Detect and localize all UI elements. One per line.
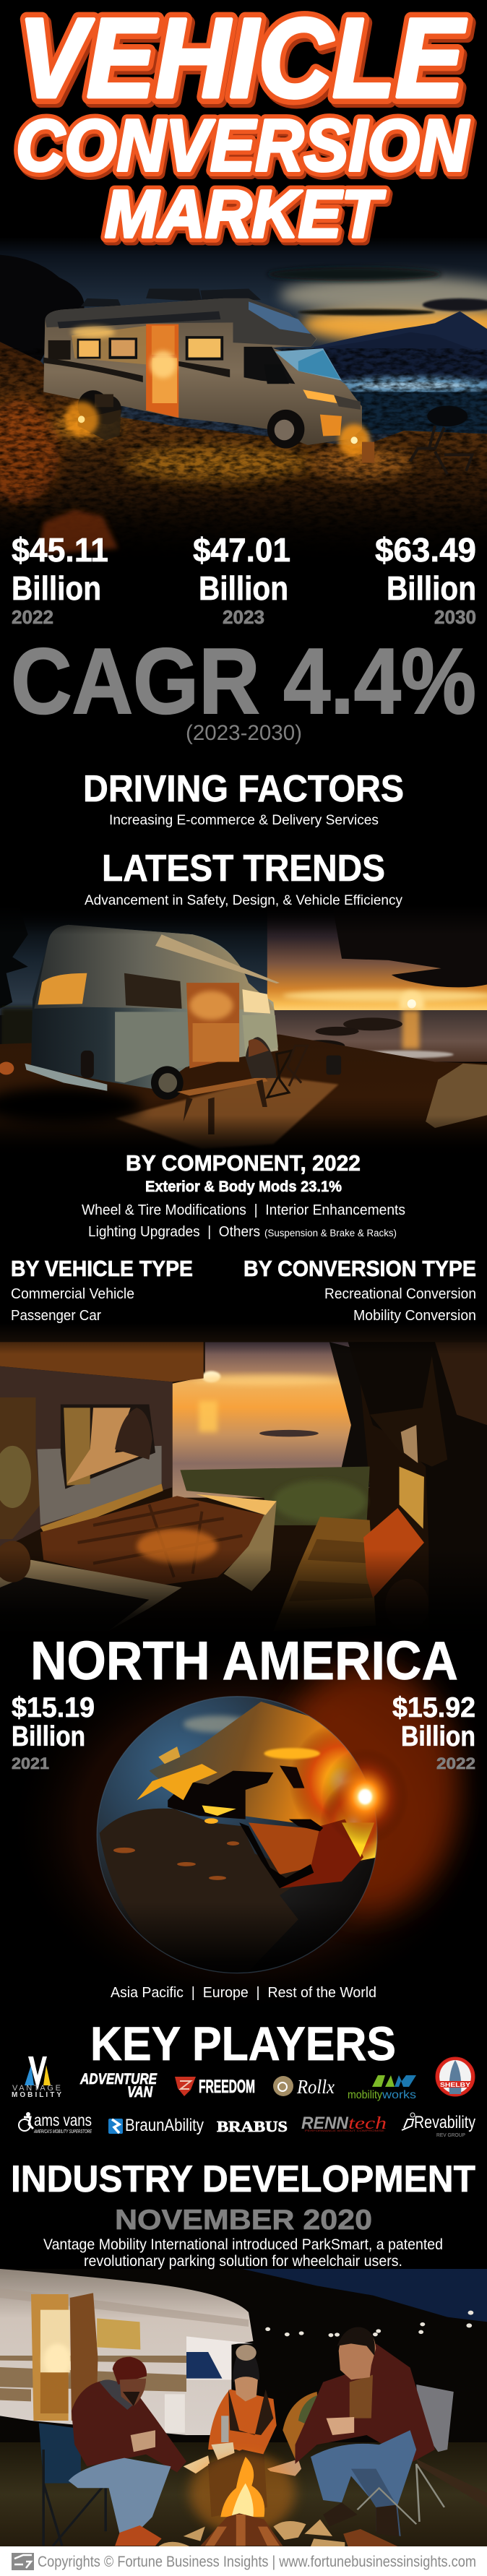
latest trend text: Advancement in Safety, Design, & Vehicle Efficiency bbox=[85, 893, 402, 908]
heading: industry development: INDUSTRY DEVELOPMENT bbox=[11, 2158, 475, 2200]
logo: MobilityWorks bbox=[348, 2075, 416, 2101]
figure: 2030 bbox=[375, 531, 476, 628]
component list line one: Wheel & Tire Modifications | Interior Enhancements bbox=[82, 1202, 405, 1218]
component list note: (Suspension & Brake & Racks) bbox=[264, 1228, 397, 1239]
logo: Vantage Mobility: VANTAGE bbox=[12, 2084, 61, 2093]
image: van interior looking out at sunset bbox=[0, 1323, 487, 1636]
column: by vehicle type: Commercial Vehicle bbox=[11, 1286, 134, 1302]
column: by conversion type bbox=[244, 1256, 476, 1324]
logo: BraunAbility: BraunAbility bbox=[125, 2116, 204, 2135]
logo: Rollx: Rollx bbox=[296, 2076, 335, 2098]
figure: North America 2021 bbox=[12, 1692, 95, 1772]
column: by vehicle type: BY VEHICLE TYPE bbox=[11, 1256, 193, 1281]
title line: MARKET: MARKET bbox=[105, 176, 386, 251]
figure: 2022 bbox=[12, 531, 108, 628]
CAGR period: (2023-2030) bbox=[186, 721, 302, 745]
figure: North America 2022 bbox=[392, 1692, 475, 1772]
logo: ams vans: AMERICA'S MOBILITY SUPERSTORE bbox=[33, 2129, 92, 2135]
figure: North America 2022: $15.92 bbox=[392, 1692, 475, 1723]
title: Vehicle Conversion Market bbox=[16, 0, 470, 251]
development description: revolutionary parking solution for wheelchair users. bbox=[84, 2253, 402, 2270]
heading: key players: KEY PLAYERS bbox=[90, 2017, 396, 2070]
logo: ams vans bbox=[19, 2111, 92, 2135]
figure: North America 2021: $15.19 bbox=[12, 1692, 95, 1723]
figure: 2030: Billion bbox=[387, 569, 476, 607]
logo: RENNtech bbox=[301, 2114, 387, 2133]
logo: Vantage Mobility bbox=[12, 2056, 61, 2099]
image: friends around a campfire by the RV bbox=[0, 2269, 487, 2546]
footer bar bbox=[0, 2546, 487, 2576]
logo: Shelby: SHELBY bbox=[440, 2081, 470, 2088]
figure: North America 2022: Billion bbox=[401, 1721, 475, 1752]
logo: Revability: Revability bbox=[414, 2113, 475, 2132]
logo: Brabus: BRABUS bbox=[217, 2118, 288, 2135]
logo: MobilityWorks: mobility bbox=[348, 2089, 382, 2101]
globe illustration bbox=[49, 1645, 478, 1980]
development description bbox=[43, 2236, 443, 2270]
logo: Freedom: FREEDOM bbox=[199, 2077, 255, 2097]
title line: MARKET: MARKET bbox=[105, 176, 386, 251]
image: camper van on beach at sunset bbox=[0, 905, 487, 1160]
development description: Vantage Mobility International introduced ParkSmart, a patented bbox=[43, 2236, 443, 2253]
logo: ams vans: ams vans bbox=[34, 2111, 92, 2129]
development date: NOVEMBER 2020 bbox=[115, 2205, 372, 2236]
column: by vehicle type bbox=[11, 1256, 193, 1324]
market size figures bbox=[12, 531, 476, 628]
column: by conversion type: Recreational Conversion bbox=[324, 1286, 476, 1302]
figure: 2023: $47.01 bbox=[193, 531, 290, 569]
logo: RENNtech: RENN bbox=[301, 2114, 349, 2133]
heading: by component: BY COMPONENT, 2022 bbox=[126, 1150, 361, 1176]
component list line two: Lighting Upgrades | Others bbox=[88, 1224, 260, 1240]
heading: driving factors: DRIVING FACTORS bbox=[83, 768, 404, 810]
logo: Adventure Van bbox=[79, 2071, 158, 2101]
figure: 2022: $45.11 bbox=[12, 531, 108, 569]
hero image: motorhome at dusk bbox=[0, 237, 487, 571]
logo: Freedom bbox=[175, 2077, 255, 2097]
column: by conversion type: Mobility Conversion bbox=[353, 1308, 476, 1324]
column: by vehicle type: Passenger Car bbox=[11, 1308, 101, 1324]
heading: latest trends: LATEST TRENDS bbox=[102, 848, 385, 889]
driving factor text: Increasing E-commerce & Delivery Services bbox=[109, 813, 379, 828]
logo: RENNtech: tech bbox=[348, 2114, 387, 2133]
logo: Adventure Van: ADVENTURE bbox=[79, 2071, 158, 2088]
logo: Shelby bbox=[436, 2057, 475, 2096]
footer logo bbox=[12, 2553, 34, 2570]
figure: 2023: 2023 bbox=[223, 606, 264, 628]
figure: 2023: Billion bbox=[199, 569, 288, 607]
figure: 2022: 2022 bbox=[12, 606, 53, 628]
figure: North America 2022: 2022 bbox=[436, 1754, 475, 1772]
logo: RENNtech: PERFORMANCE WITHOUT COMPROMISE bbox=[305, 2129, 384, 2132]
logo: Adventure Van: VAN bbox=[127, 2084, 153, 2101]
heading: North America: NORTH AMERICA bbox=[30, 1630, 458, 1691]
figure: 2022: Billion bbox=[12, 569, 101, 607]
figure: North America 2021: Billion bbox=[12, 1721, 85, 1752]
logo: Revability bbox=[402, 2113, 475, 2138]
logo: MobilityWorks: works bbox=[382, 2089, 416, 2101]
logo: Revability: REV GROUP bbox=[436, 2133, 465, 2138]
figure: 2030: $63.49 bbox=[375, 531, 476, 569]
logo: Rollx bbox=[273, 2076, 335, 2098]
other regions: Asia Pacific | Europe | Rest of the World bbox=[111, 1985, 376, 2001]
leading component share: Exterior & Body Mods 23.1% bbox=[145, 1179, 342, 1195]
figure: North America 2021: 2021 bbox=[12, 1754, 49, 1772]
figure: 2030: 2030 bbox=[434, 606, 476, 628]
figure: 2023 bbox=[193, 531, 290, 628]
logo: Vantage Mobility: MOBILITY bbox=[12, 2091, 61, 2099]
